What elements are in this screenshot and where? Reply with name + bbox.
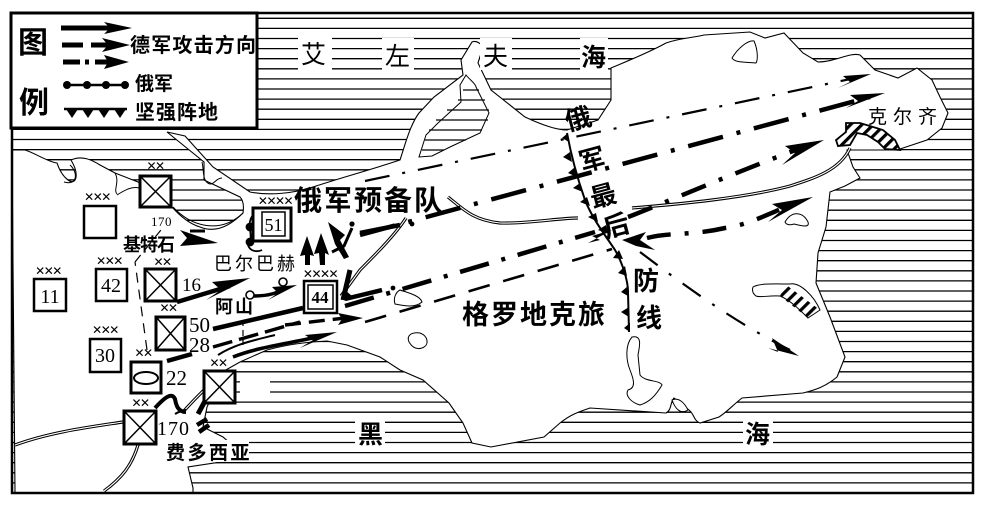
dashed arrow: Gorodok brigade — [365, 249, 612, 322]
Russian final defence line — [562, 133, 630, 332]
unit: 51st army, xxxx: 51 — [264, 215, 282, 235]
small lakes — [394, 41, 820, 412]
thin dash-dot-dot arrow: south-east — [640, 252, 790, 350]
number labels: 22 — [166, 366, 187, 390]
arrowheads on east side — [588, 74, 885, 356]
sea names: Black Sea: 黑 — [358, 421, 383, 449]
unit: division 132: ✕✕ — [209, 356, 227, 370]
unit: armoured 22: ✕✕ — [134, 346, 152, 360]
Russian line around 51 — [246, 215, 262, 251]
legend panel: 坚强阵地 — [135, 101, 219, 124]
unit: armoured 22 — [131, 346, 161, 393]
heading: Russian last defence line: 俄 — [562, 101, 595, 137]
unit: 44th army, xxxx: 44 — [312, 288, 329, 307]
thick dash-dot arrow: central — [360, 97, 870, 235]
unit: division 16: ✕✕ — [153, 255, 171, 269]
heading: Russian last defence line: 防 — [633, 266, 659, 296]
hatched lagoon on east coast — [780, 284, 820, 318]
place label: Ak-Monai: 阿山 — [215, 297, 255, 317]
heading: Grodetsky brigade: 格罗地克旅 — [462, 300, 607, 330]
Kerch city — [836, 123, 900, 150]
legend: dash-dot attack arrow — [63, 55, 129, 69]
sea names: Black Sea: 海 — [745, 421, 770, 449]
German attack arrows west of Ak-Monai — [135, 225, 363, 361]
thick dash-dot arrow: Kerch — [628, 144, 812, 217]
unit: 44th army, xxxx — [303, 267, 338, 313]
rivers — [15, 148, 850, 491]
unit: division 50: ✕✕ — [159, 301, 177, 315]
lagoon: inner sea on the spit — [419, 75, 489, 157]
unit: crossed box north — [140, 159, 171, 207]
sea names: Azov Sea: 艾 — [301, 41, 326, 69]
German attack arrows, dash-dot lines — [345, 77, 870, 350]
unit: blank army square — [84, 190, 116, 238]
unit: 51st army, xxxx — [253, 194, 293, 241]
Russian arrows near reserve — [300, 221, 414, 300]
sea names: Azov Sea: 海 — [581, 44, 606, 72]
heading: Russian last defence line: 后 — [600, 208, 633, 244]
defence line triangles — [562, 133, 630, 332]
thin dash-dot arrow: northern — [365, 77, 860, 181]
heading: Russian last defence line: 军 — [576, 142, 609, 178]
legend panel — [11, 13, 257, 128]
heading: Russian last defence line: 最 — [587, 178, 620, 214]
legend panel: 俄军 — [135, 73, 173, 95]
unit: 30: 30 — [95, 345, 115, 367]
sea names: Azov Sea: 左 — [385, 43, 410, 71]
number labels — [151, 214, 268, 440]
legend: Russian line — [63, 81, 129, 89]
unit: 42: 42 — [101, 275, 121, 297]
unit: division 16 — [145, 255, 176, 301]
thick line: southern main attack — [345, 232, 595, 306]
number labels: 170 — [151, 214, 172, 229]
number labels: 16 — [182, 275, 201, 296]
unit: 11: ✕✕✕ — [35, 264, 61, 278]
unit: 11 — [34, 264, 66, 311]
legend title — [18, 27, 49, 120]
heading: Russian last defence line — [562, 101, 662, 333]
sea names: Azov Sea: 夫 — [483, 43, 508, 71]
unit: division 170: ✕✕ — [131, 396, 149, 410]
unit: 30 — [90, 323, 121, 372]
legend title: 图 — [18, 27, 48, 60]
unit: blank army square: ✕✕✕ — [84, 190, 110, 204]
unit: 42 — [96, 254, 127, 301]
place label: Kerch: 克尔齐 — [868, 106, 943, 128]
number labels: 132 — [239, 378, 268, 399]
coast detail and Syvash spit north-west — [64, 162, 243, 226]
number labels: 28 — [189, 333, 210, 357]
legend: fortified line — [64, 109, 127, 118]
legend: solid attack arrow — [61, 22, 132, 34]
unit: 51st army, xxxx: ✕✕✕✕ — [258, 194, 293, 208]
unit: division 50 — [156, 301, 185, 350]
legend title: 例 — [19, 87, 49, 120]
Feodosia attack strokes — [155, 396, 209, 432]
unit: 44th army, xxxx: ✕✕✕✕ — [303, 267, 338, 281]
legend labels: 德军攻击方向 — [130, 33, 257, 57]
unit: crossed box north: ✕✕ — [146, 159, 164, 173]
legend: dashed attack arrow — [62, 38, 130, 52]
sea names: Black Sea — [358, 421, 770, 449]
place label: Kitai: 基特石 — [123, 235, 174, 255]
unit: 11: 11 — [40, 286, 60, 308]
sea label backgrounds — [165, 36, 773, 462]
unit: division 132 — [204, 356, 235, 403]
place label: Parpach: 巴尔巴赫 — [214, 254, 298, 274]
heading: Russian last defence line: 线 — [636, 303, 662, 333]
place label: Feodosia: 费多西亚 — [166, 442, 252, 464]
unit: 30: ✕✕✕ — [92, 323, 118, 337]
unit: 42: ✕✕✕ — [96, 254, 122, 268]
heading: Russian reserves: 俄军预备队 — [294, 185, 444, 216]
sea names: Azov Sea — [301, 41, 606, 72]
thick dash-dot arrow: after breakthrough — [647, 201, 802, 238]
number labels: 170 — [157, 418, 190, 440]
unit: division 170 — [124, 396, 156, 444]
number labels: 50 — [189, 313, 210, 337]
